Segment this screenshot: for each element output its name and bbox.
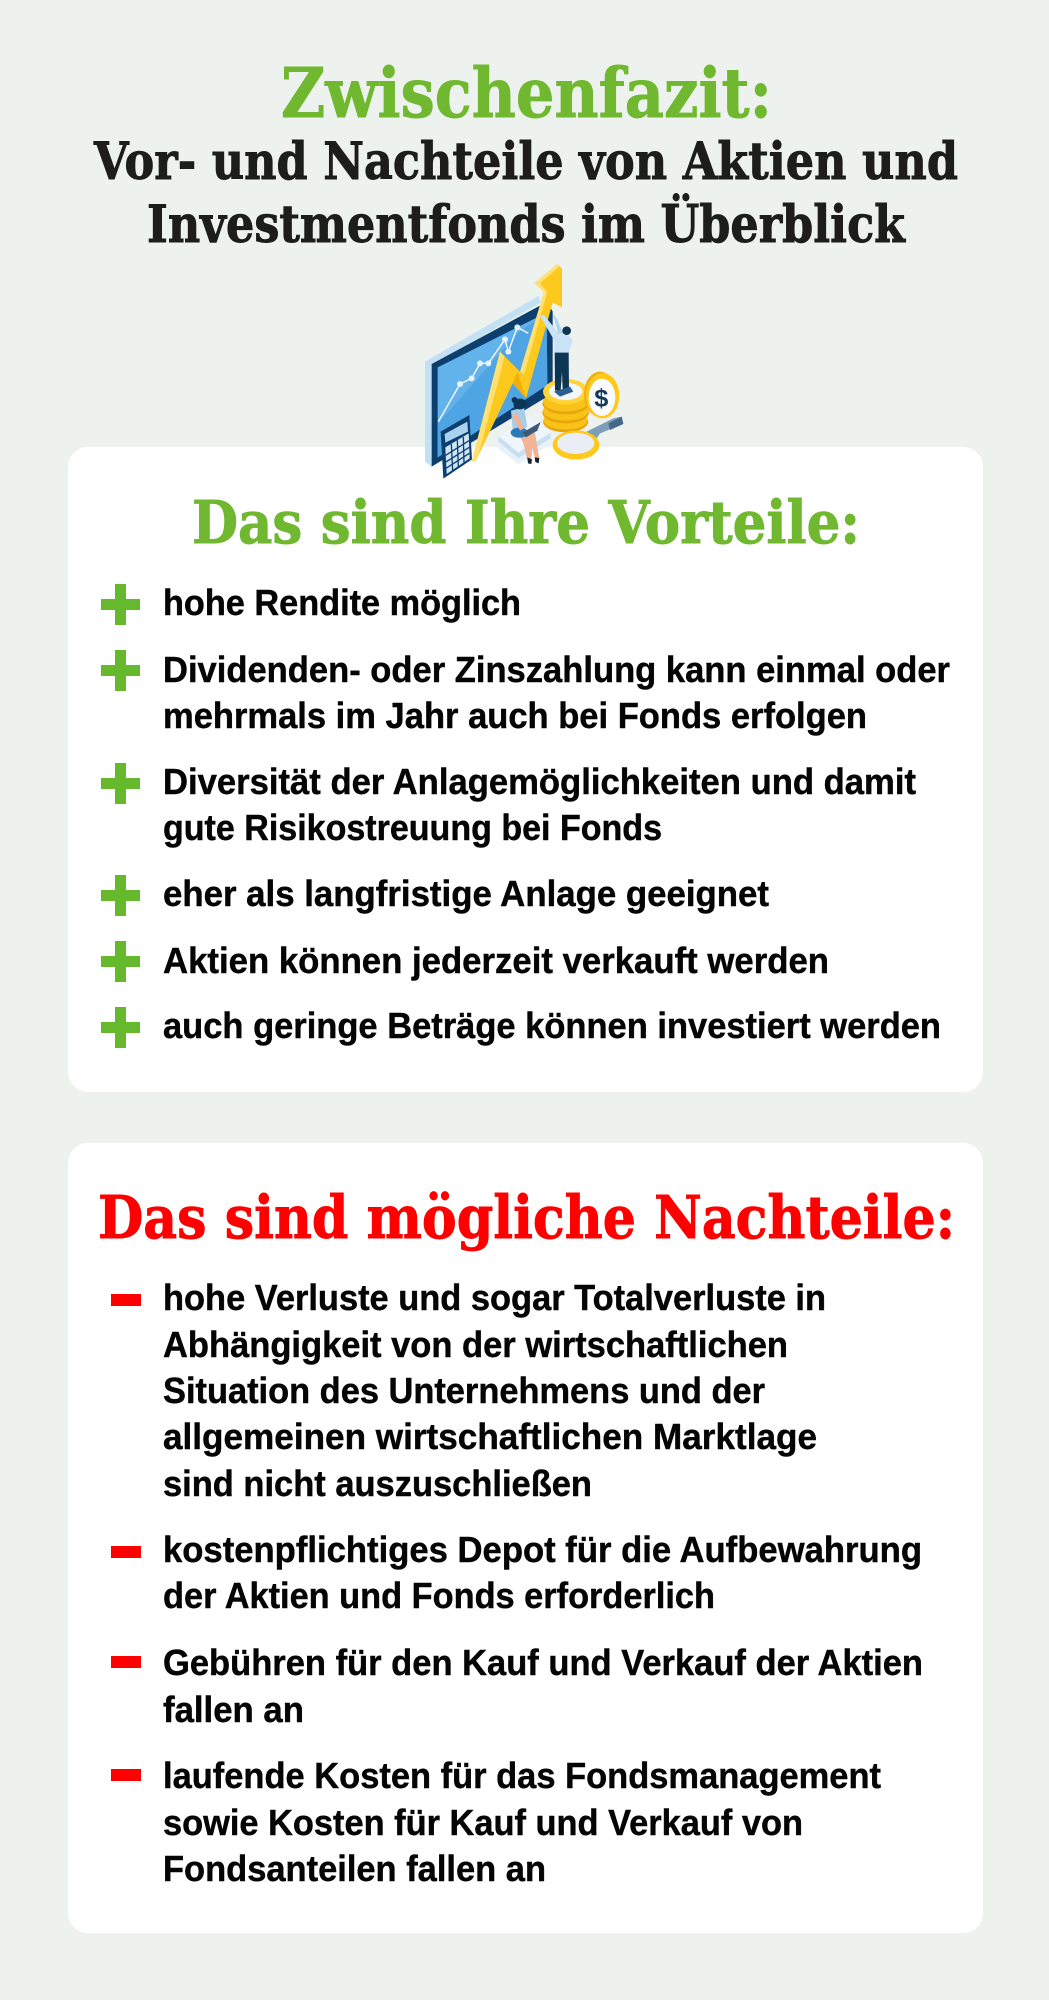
item: Dividenden: mehrmals im Jahr auch bei Fonds erfolgen — [163, 695, 867, 736]
item: laufende Kosten: Fondsanteilen fallen an — [163, 1848, 546, 1889]
item: Depot: kostenpflichtiges Depot für die Aufbewahrung — [163, 1529, 922, 1570]
item: Diversität — [101, 761, 916, 848]
subtitle line 2: Investmentfonds im Überblick — [147, 194, 906, 255]
rising arrow — [472, 264, 562, 462]
big coin: $ — [594, 385, 608, 413]
panel: Nachteile — [68, 1143, 983, 1933]
paper stack — [498, 416, 551, 464]
item: hohe Verluste: Situation des Unternehmens und der — [163, 1370, 765, 1411]
illustration: finance scene — [425, 264, 623, 479]
coin stack — [542, 379, 589, 432]
item: Depot: der Aktien und Fonds erforderlich — [163, 1575, 715, 1616]
heading: Nachteile: Das sind mögliche Nachteile: — [98, 1183, 955, 1252]
heading: Vorteile: Das sind Ihre Vorteile: — [192, 488, 860, 557]
item: hohe Verluste: allgemeinen wirtschaftlichen Marktlage — [163, 1416, 817, 1457]
item: Gebühren: fallen an — [163, 1689, 304, 1730]
item: Gebühren — [111, 1642, 923, 1730]
item: Depot — [111, 1529, 922, 1616]
item: Dividenden — [101, 649, 950, 736]
item: laufende Kosten: laufende Kosten für das Fondsmanagement — [163, 1755, 881, 1796]
magnifier — [553, 417, 623, 460]
item: hohe Verluste: hohe Verluste und sogar Totalverluste in — [163, 1277, 826, 1318]
title block — [93, 54, 958, 255]
calculator — [441, 415, 472, 479]
item: langfristige Anlage: eher als langfristige Anlage geeignet — [163, 873, 769, 914]
item: Aktien verkaufen: Aktien können jederzeit verkauft werden — [163, 940, 829, 981]
monitor — [425, 296, 553, 467]
title line: Zwischenfazit: Zwischenfazit: — [281, 54, 772, 134]
item: hohe Rendite: hohe Rendite möglich — [163, 582, 521, 623]
item: laufende Kosten — [111, 1755, 881, 1889]
item: Diversität: gute Risikostreuung bei Fonds — [163, 807, 662, 848]
item: Dividenden: Dividenden- oder Zinszahlung kann einmal oder — [163, 649, 950, 690]
item: hohe Verluste: Abhängigkeit von der wirtschaftlichen — [163, 1324, 788, 1365]
seated woman — [511, 397, 541, 464]
panel: Vorteile — [68, 447, 983, 1092]
item: hohe Verluste: sind nicht auszuschließen — [163, 1463, 592, 1504]
item: laufende Kosten: sowie Kosten für Kauf und Verkauf von — [163, 1802, 803, 1843]
big coin — [584, 372, 619, 418]
item: Gebühren: Gebühren für den Kauf und Verkauf der Aktien — [163, 1642, 923, 1683]
item: geringe Beträge: auch geringe Beträge können investiert werden — [163, 1005, 941, 1046]
item: Diversität: Diversität der Anlagemöglichkeiten und damit — [163, 761, 916, 802]
item: hohe Verluste — [111, 1277, 826, 1504]
standing man — [540, 313, 573, 397]
